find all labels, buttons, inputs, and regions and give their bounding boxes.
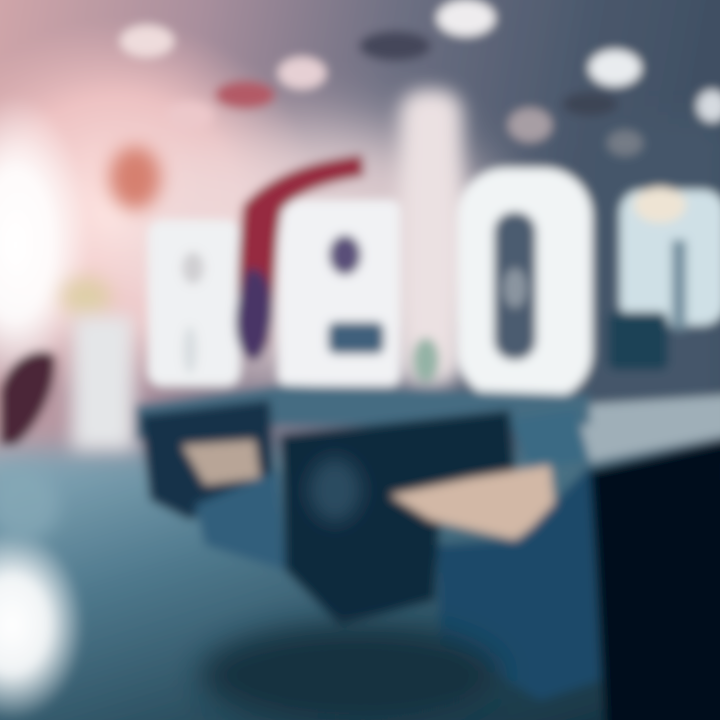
background wall (0, 0, 720, 490)
right wall shadow (585, 120, 720, 420)
red letter stroke (236, 155, 364, 360)
chair center (309, 458, 361, 522)
desk middle dark (280, 410, 515, 625)
right letter dark base (608, 312, 668, 370)
small plant (413, 338, 439, 382)
O counter (494, 212, 536, 360)
R leg gap (183, 326, 197, 374)
desk right panel (510, 410, 590, 470)
E upper gap (329, 235, 361, 275)
back wall haze (130, 125, 510, 375)
dark front cabinet (590, 440, 720, 720)
right desk top (575, 395, 720, 462)
floor (0, 450, 720, 720)
yellow accent (61, 277, 111, 317)
peach desk left (182, 440, 260, 485)
R counter (182, 252, 204, 284)
right letter stem shadow (672, 240, 686, 330)
desk left dark (140, 400, 275, 520)
right letter (608, 187, 720, 370)
left floor glow (0, 530, 84, 720)
pink wall haze (0, 20, 320, 400)
right letter warm top (634, 187, 686, 223)
floor shadow (200, 625, 500, 720)
peach desk right (390, 465, 555, 540)
tall central column (400, 90, 462, 385)
orange-red accent (109, 146, 161, 210)
letter R (148, 220, 240, 386)
ceiling lights (120, 0, 720, 156)
letter O (458, 168, 592, 400)
desk left front (195, 470, 285, 570)
E lower gap (328, 322, 384, 354)
letter E (278, 200, 400, 386)
front desk blue (438, 465, 600, 700)
chair (0, 351, 55, 445)
left floor object (0, 469, 59, 541)
desk row back strip (135, 385, 590, 440)
O counter highlight (503, 268, 527, 308)
white pillar left (72, 315, 134, 450)
left window glow (0, 95, 90, 395)
